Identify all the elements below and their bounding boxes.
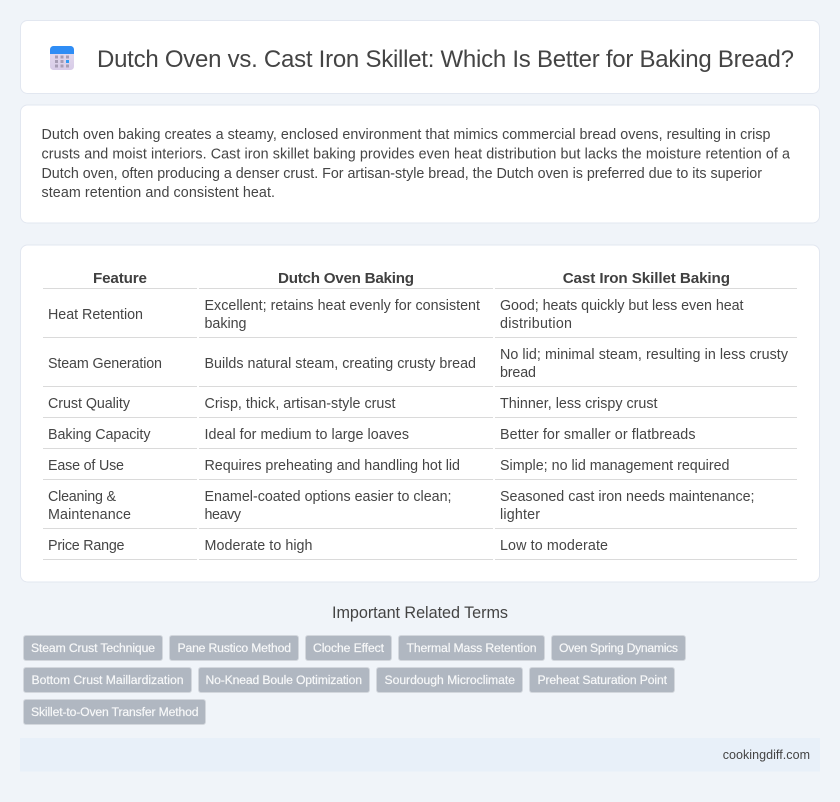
row: price range: Moderate to high xyxy=(204,538,313,554)
tag xyxy=(306,636,392,660)
panel: comparison table xyxy=(20,245,820,582)
intro text: crusts and moist interiors. Cast iron skillet baking provides even heat distribution but lacks the moisture retention of a xyxy=(42,146,790,162)
row: heat retention: baking xyxy=(204,316,247,332)
tag xyxy=(530,668,674,692)
row: crust quality: Crust Quality xyxy=(48,396,131,412)
tag: No-Knead Boule Optimization xyxy=(206,673,362,687)
tag xyxy=(24,636,162,660)
row: steam generation: Steam Generation xyxy=(48,356,162,372)
tag: Skillet-to-Oven Transfer Method xyxy=(31,705,198,719)
row: ease of use: Requires preheating and handling hot lid xyxy=(204,458,460,474)
panel: introduction xyxy=(20,105,820,223)
table header: Feature xyxy=(93,270,147,287)
row: price range xyxy=(48,538,608,554)
row: heat retention: Excellent; retains heat evenly for consistent xyxy=(204,298,480,314)
tag xyxy=(24,700,206,724)
row: heat retention xyxy=(48,298,744,332)
row: ease of use xyxy=(48,458,730,474)
row: baking capacity: Ideal for medium to large loaves xyxy=(204,427,409,443)
tag xyxy=(552,636,686,660)
tag: Cloche Effect xyxy=(313,641,385,655)
row: cleaning and maintenance xyxy=(48,489,754,523)
row: steam generation xyxy=(48,347,789,381)
row: steam generation: Builds natural steam, creating crusty bread xyxy=(204,356,476,372)
tag xyxy=(398,636,544,660)
tag: Sourdough Microclimate xyxy=(384,673,515,687)
tag: Pane Rustico Method xyxy=(178,641,291,655)
row: heat retention: distribution xyxy=(500,316,572,332)
row: baking capacity: Better for smaller or flatbreads xyxy=(500,427,696,443)
tag: Steam Crust Technique xyxy=(31,641,155,655)
tag: Bottom Crust Maillardization xyxy=(32,673,184,687)
row: cleaning and maintenance: heavy xyxy=(204,507,242,523)
title: Dutch Oven vs. Cast Iron Skillet: Which Is Better for Baking Bread? xyxy=(97,46,794,73)
row: cleaning and maintenance: Seasoned cast iron needs maintenance; xyxy=(500,489,754,505)
row: baking capacity xyxy=(48,427,696,443)
tag: Thermal Mass Retention xyxy=(406,641,536,655)
intro text: Dutch oven, often producing a denser crust. For artisan-style bread, the Dutch oven is preferred due to its superior xyxy=(42,166,762,182)
row: ease of use: Simple; no lid management required xyxy=(500,458,730,474)
row: cleaning and maintenance: Cleaning & xyxy=(48,489,116,505)
row: crust quality xyxy=(48,396,658,412)
intro text xyxy=(42,127,790,201)
footer: cookingdiff.com xyxy=(723,748,810,762)
row: cleaning and maintenance: Enamel-coated options easier to clean; xyxy=(204,489,452,505)
heading: related terms: Important Related Terms xyxy=(332,604,508,622)
tag xyxy=(198,668,370,692)
tag xyxy=(24,668,192,692)
table header: Cast Iron Skillet Baking xyxy=(563,270,730,287)
tag: Oven Spring Dynamics xyxy=(559,641,678,655)
intro text: Dutch oven baking creates a steamy, enclosed environment that mimics commercial bread ovens, resulting in crisp xyxy=(42,127,771,143)
intro text: steam retention and consistent heat. xyxy=(42,185,275,201)
row: price range: Low to moderate xyxy=(500,538,608,554)
icon: calendar xyxy=(50,46,74,70)
tag xyxy=(376,668,522,692)
tag: Preheat Saturation Point xyxy=(538,673,668,687)
row: baking capacity: Baking Capacity xyxy=(48,427,151,443)
footer xyxy=(20,738,820,772)
tag list xyxy=(24,636,686,724)
row: steam generation: No lid; minimal steam, resulting in less crusty xyxy=(500,347,789,363)
table header xyxy=(93,270,730,287)
row: heat retention: Heat Retention xyxy=(48,307,143,323)
table header: Dutch Oven Baking xyxy=(278,270,414,287)
row: crust quality: Thinner, less crispy crust xyxy=(500,396,658,412)
row: cleaning and maintenance: Maintenance xyxy=(48,507,131,523)
row: price range: Price Range xyxy=(48,538,125,554)
row: crust quality: Crisp, thick, artisan-style crust xyxy=(204,396,396,412)
row: cleaning and maintenance: lighter xyxy=(500,507,540,523)
panel: header xyxy=(20,20,820,94)
row: steam generation: bread xyxy=(500,365,536,381)
row: heat retention: Good; heats quickly but less even heat xyxy=(500,298,744,314)
tag xyxy=(170,636,298,660)
row: ease of use: Ease of Use xyxy=(48,458,124,474)
